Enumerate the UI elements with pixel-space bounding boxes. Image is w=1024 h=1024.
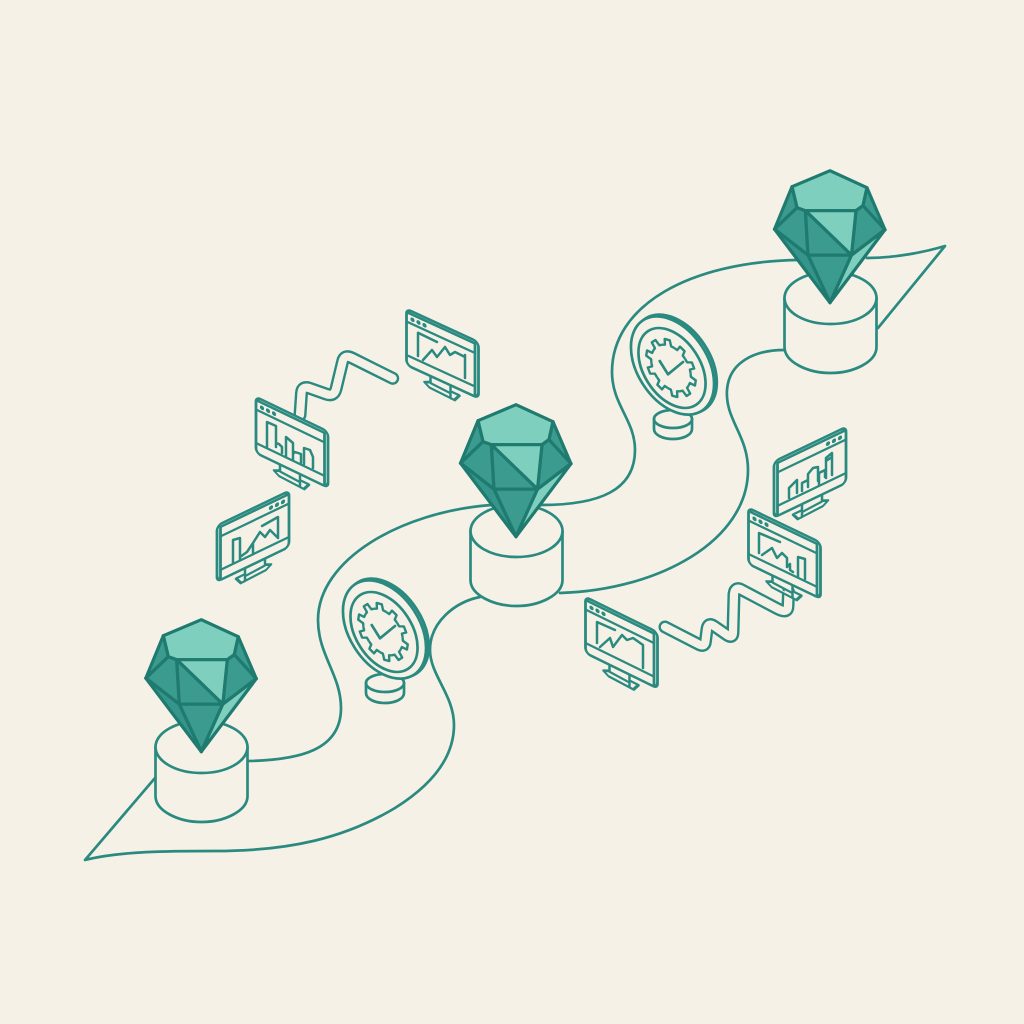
zigzag connector: lower right: [665, 589, 788, 645]
monitor: right mixed chart: [748, 508, 820, 612]
node: upper right gem on cylinder: [774, 171, 885, 373]
monitor: lower left mixed chart: [217, 491, 289, 595]
icon: gear check dial, upper: [614, 300, 734, 439]
monitor: lower center line chart: [586, 597, 658, 701]
icon: gear check dial, lower: [326, 564, 446, 703]
path: upper outer route: [560, 350, 784, 593]
path: lower inner route: [248, 505, 491, 761]
monitor: top center line chart: [406, 309, 478, 411]
zigzag connector: upper left: [300, 357, 393, 415]
monitor: left bar chart: [256, 397, 328, 501]
node: lower left gem on cylinder: [146, 620, 256, 822]
node: center gem on cylinder: [460, 405, 571, 606]
path: upper inner route: [541, 260, 797, 505]
path: top right arrow point: [867, 246, 945, 328]
monitor: right bar chart: [774, 427, 846, 531]
path: lower outer route with arrow point: [85, 597, 480, 860]
